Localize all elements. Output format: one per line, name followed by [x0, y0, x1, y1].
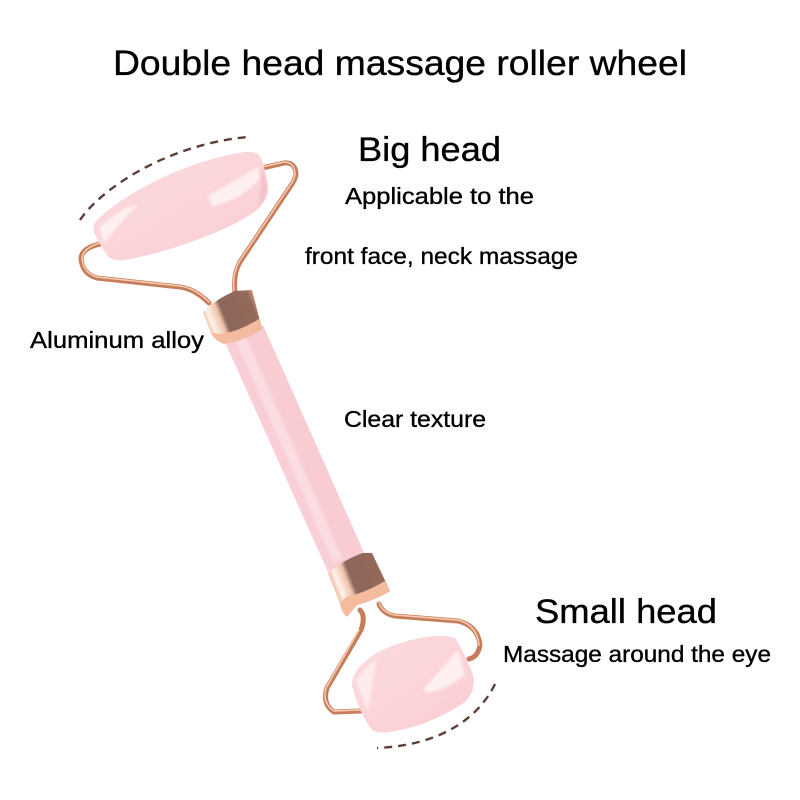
dashed arc: small head [377, 684, 495, 748]
small head stone [352, 636, 474, 732]
heading: small head: Small head [535, 593, 717, 631]
text: applicable line 1: Applicable to the [345, 183, 534, 209]
label: aluminum alloy: Aluminum alloy [30, 327, 205, 353]
bottom collar [328, 553, 390, 617]
big head stone [94, 152, 268, 260]
text: applicable line 2: front face, neck massage [305, 243, 578, 269]
text: massage around the eye: Massage around the eye [503, 641, 771, 667]
heading: big head: Big head [358, 131, 501, 169]
small head frame [325, 603, 480, 712]
big head frame [81, 162, 296, 303]
label: clear texture: Clear texture [344, 406, 486, 432]
jade roller [81, 152, 480, 733]
handle [224, 325, 365, 572]
top collar [203, 290, 262, 344]
title: Double head massage roller wheel [113, 44, 687, 83]
dashed arc: big head [80, 137, 247, 220]
